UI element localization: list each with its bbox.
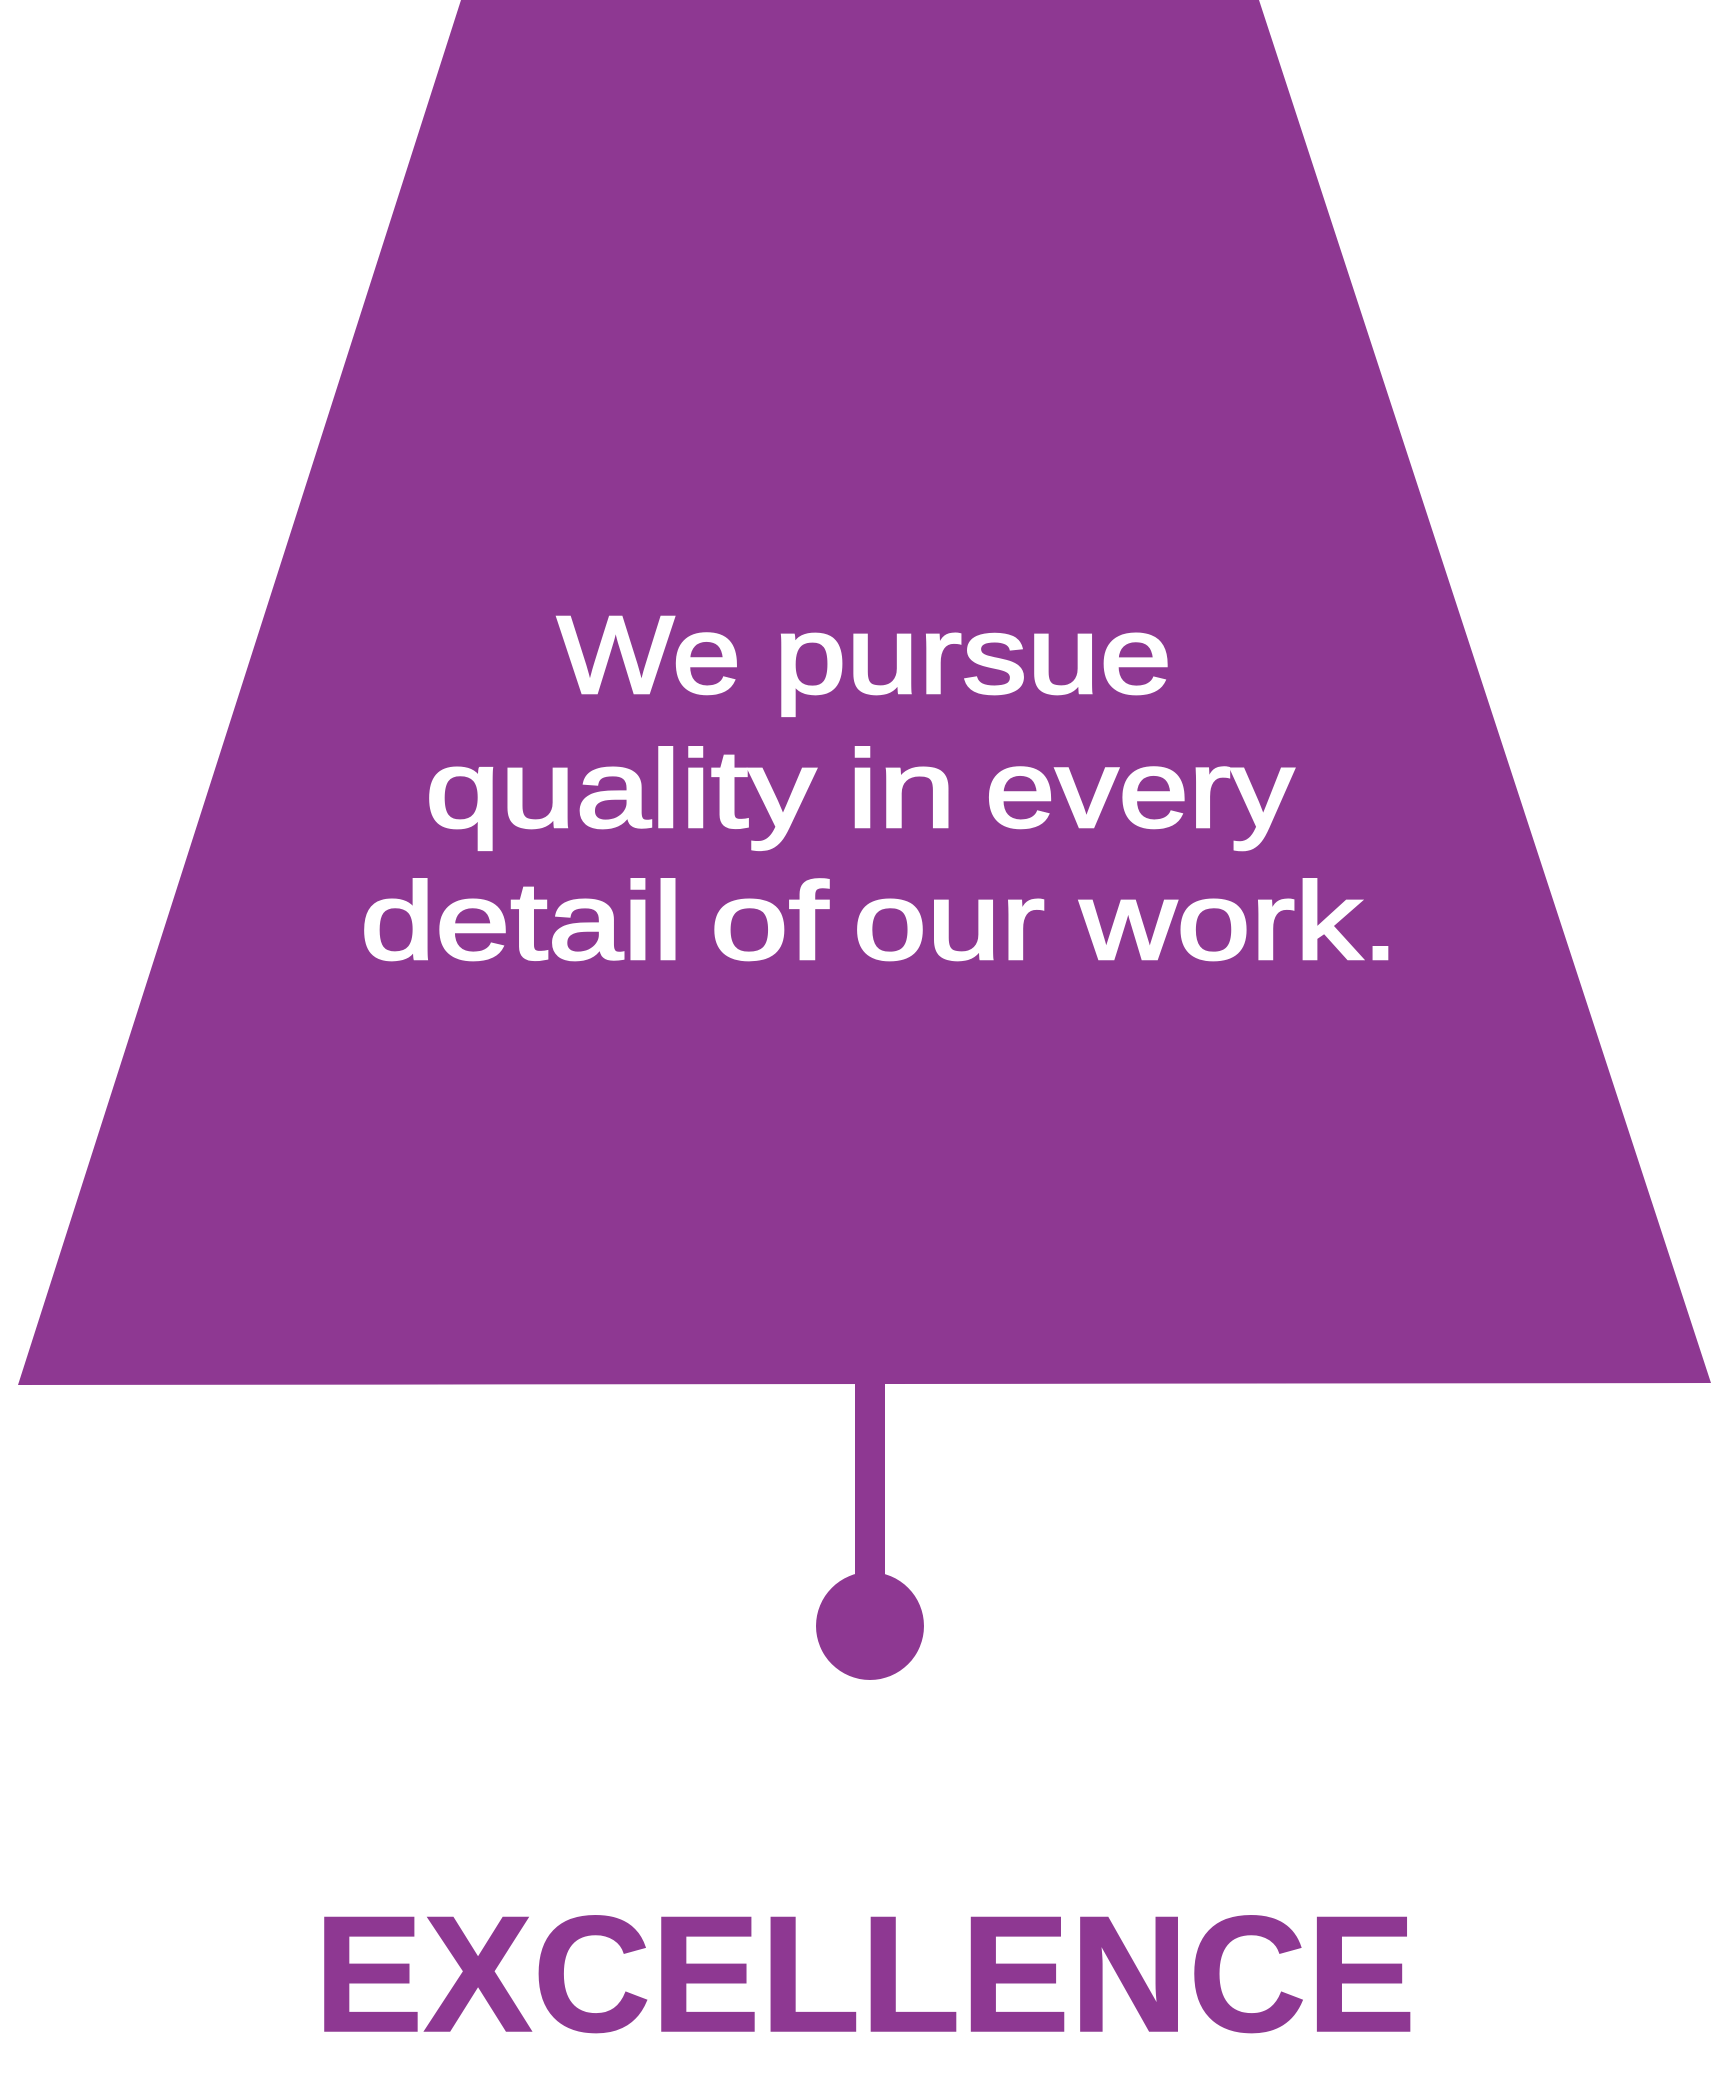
text block: quality statement (360, 594, 1399, 983)
text block: quality statement: pursue (774, 594, 1172, 717)
text block: quality statement: of (710, 860, 829, 983)
heading: EXCELLENCE: EXCELLENCE (314, 1882, 1416, 2066)
text block: quality statement: in (847, 728, 956, 851)
panel: purple trapezoid (18, 0, 1711, 1385)
text block: quality statement: work. (1079, 860, 1399, 983)
text block: quality statement: detail (360, 860, 683, 983)
connector: stem and dot (816, 1384, 924, 1680)
text block: quality statement: every (985, 728, 1294, 851)
text block: quality statement: our (853, 860, 1045, 983)
text block: quality statement: quality (425, 728, 816, 851)
text block: quality statement: We (557, 594, 741, 717)
